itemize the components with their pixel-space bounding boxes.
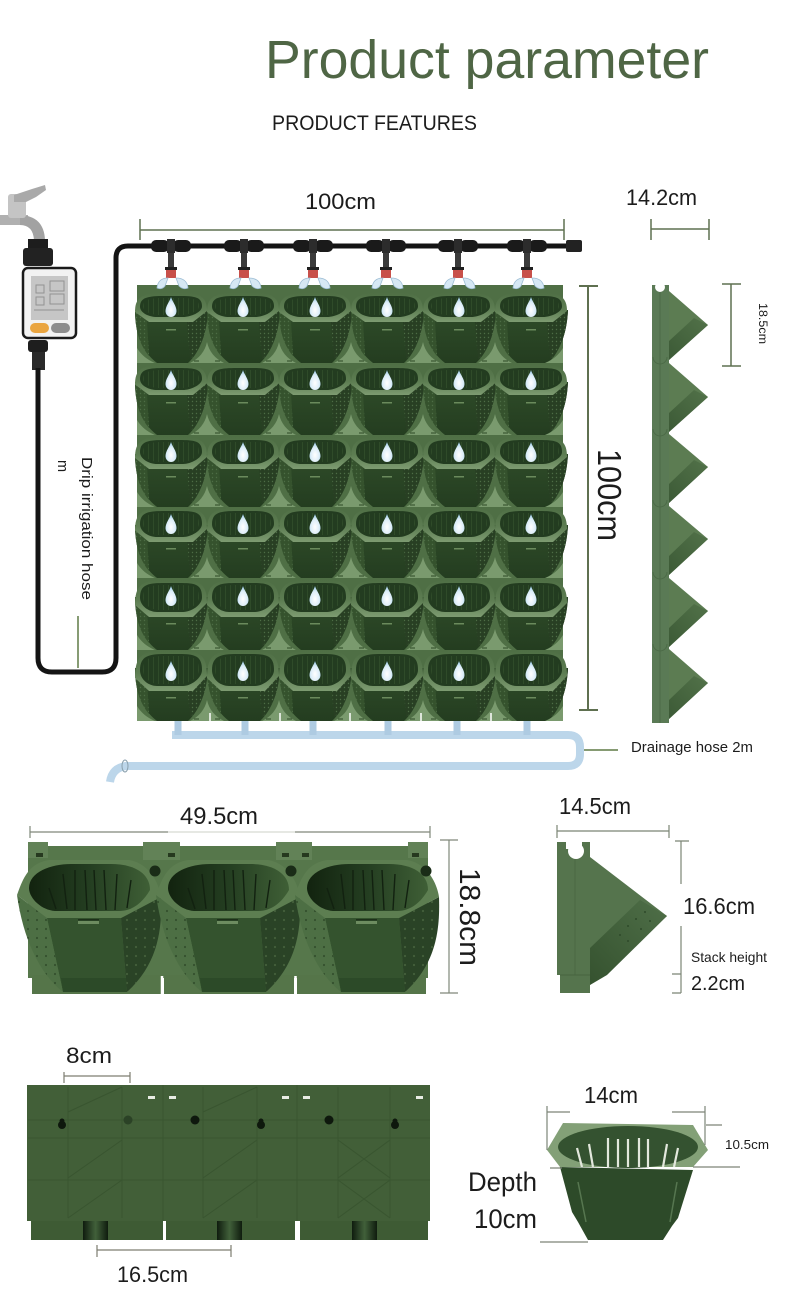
dimension: 14.5cm (557, 793, 669, 838)
callout: drip irrigation hose (54, 457, 94, 668)
row 2 pockets (135, 365, 568, 435)
panel: module rear view (27, 1085, 430, 1241)
row 4 pockets (135, 508, 568, 578)
dimension: 16.6cm and stack height 2.2cm: Stack height (691, 949, 767, 965)
panel: removable basket (547, 1123, 708, 1240)
row 5 pockets (135, 580, 568, 650)
dimension: wall width 100cm: 100cm (305, 189, 376, 214)
drainage hose (110, 721, 580, 782)
dimension: 49.5cm: 49.5cm (180, 803, 258, 830)
dimension: depth 10cm: Depth (468, 1167, 537, 1197)
dimension: pitch 18.5cm: 18.5cm (756, 303, 768, 344)
dimension: 16.6cm and stack height 2.2cm (672, 841, 767, 995)
drip irrigation hose (38, 246, 572, 672)
callout: drip irrigation hose: Drip irrigation hose (78, 457, 94, 600)
callout: drainage hose: Drainage hose 2m (631, 740, 753, 756)
drip emitters (151, 239, 547, 289)
dimension: 14cm: 14cm (584, 1082, 638, 1108)
dimension: 16.6cm and stack height 2.2cm: 2.2cm (691, 973, 745, 995)
dimension: 49.5cm (30, 803, 430, 838)
dimension: 8cm: 8cm (66, 1043, 112, 1068)
dimension: wall width 100cm (140, 189, 564, 240)
dimension: depth 10cm: 10cm (474, 1204, 537, 1234)
panel: single pocket side view (557, 840, 667, 993)
dimension: 8cm (64, 1043, 130, 1083)
dimension: profile depth 14.2cm (626, 185, 709, 240)
dimension: 18.8cm: 18.8cm (453, 868, 485, 966)
dimension: 14.5cm: 14.5cm (559, 793, 631, 819)
hose end cap (566, 240, 582, 252)
dimension: 16.5cm (97, 1245, 231, 1287)
callout: drip irrigation hose: m (54, 460, 70, 472)
icon: irrigation timer (23, 268, 76, 370)
dimension: profile depth 14.2cm: 14.2cm (626, 185, 697, 210)
dimension: 16.6cm and stack height 2.2cm: 16.6cm (683, 893, 755, 919)
dimension: 18.8cm (440, 840, 485, 993)
row 1 pockets (135, 293, 568, 363)
dimension: wall height 100cm (579, 286, 628, 710)
dimension: pitch 18.5cm (722, 284, 768, 366)
dimension: 14cm (547, 1082, 705, 1150)
title: Product parameter (265, 30, 709, 90)
dimension: wall height 100cm: 100cm (591, 449, 628, 541)
icon: water tap (0, 185, 53, 266)
dimension: 16.5cm: 16.5cm (117, 1262, 188, 1287)
subtitle: PRODUCT FEATURES (272, 112, 477, 135)
panel: wall planter with 36 pockets (135, 285, 568, 721)
dimension: 10.5cm: 10.5cm (725, 1137, 769, 1152)
dimension: depth 10cm (468, 1167, 588, 1242)
side profile of stacked planter (652, 282, 708, 723)
row 6 pockets (135, 651, 568, 721)
panel: three-pocket module front view (17, 842, 439, 995)
row 3 pockets (135, 437, 568, 507)
dimension: 10.5cm (693, 1125, 769, 1167)
